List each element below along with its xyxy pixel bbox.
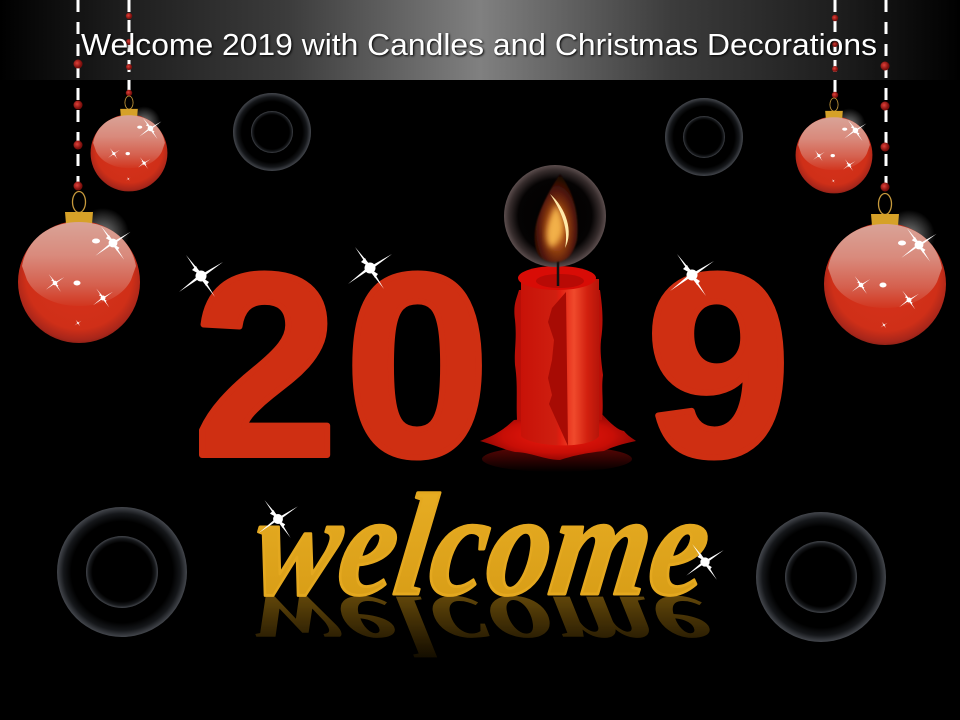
ring: top right (665, 98, 743, 176)
sparkle: on w (258, 500, 298, 538)
wax pool (480, 412, 636, 460)
string: far left with beads (74, 0, 82, 190)
welcome lettering: welcome (245, 464, 720, 626)
string: inner left with beads (126, 0, 132, 96)
dark drip shadow (548, 292, 568, 446)
ornament: large right (824, 194, 946, 345)
welcome reflection: welcome (247, 577, 719, 674)
candle top (518, 266, 596, 290)
sparkle: on 2 (179, 255, 223, 297)
string: inner right with beads (832, 0, 838, 98)
title: Welcome 2019 with Candles and Christmas Decorations (81, 28, 877, 62)
ornament: small right (796, 98, 872, 193)
flame bubble (504, 165, 606, 267)
wax drips (514, 290, 603, 420)
wick (557, 260, 559, 286)
string: far right with beads (880, 0, 890, 192)
ornament: small left (91, 96, 167, 191)
year: 2 0 9 digits: 2 (193, 221, 338, 511)
year: 2 0 9 digits: 9 (646, 221, 791, 511)
sparkle: on 0 (348, 247, 392, 289)
candle as digit 1 (480, 165, 636, 472)
year: 2 0 9 digits: 0 (345, 221, 490, 511)
title bar (0, 0, 960, 80)
flame (535, 174, 578, 262)
candle pool reflection (482, 446, 632, 472)
ring: top left (233, 93, 311, 171)
sparkle: on 9 (670, 254, 714, 296)
ring: bottom right (756, 512, 886, 642)
ornament: large left (18, 192, 140, 343)
sparkle: on e (686, 544, 724, 580)
candle body (521, 279, 599, 445)
ring: bottom left (57, 507, 187, 637)
